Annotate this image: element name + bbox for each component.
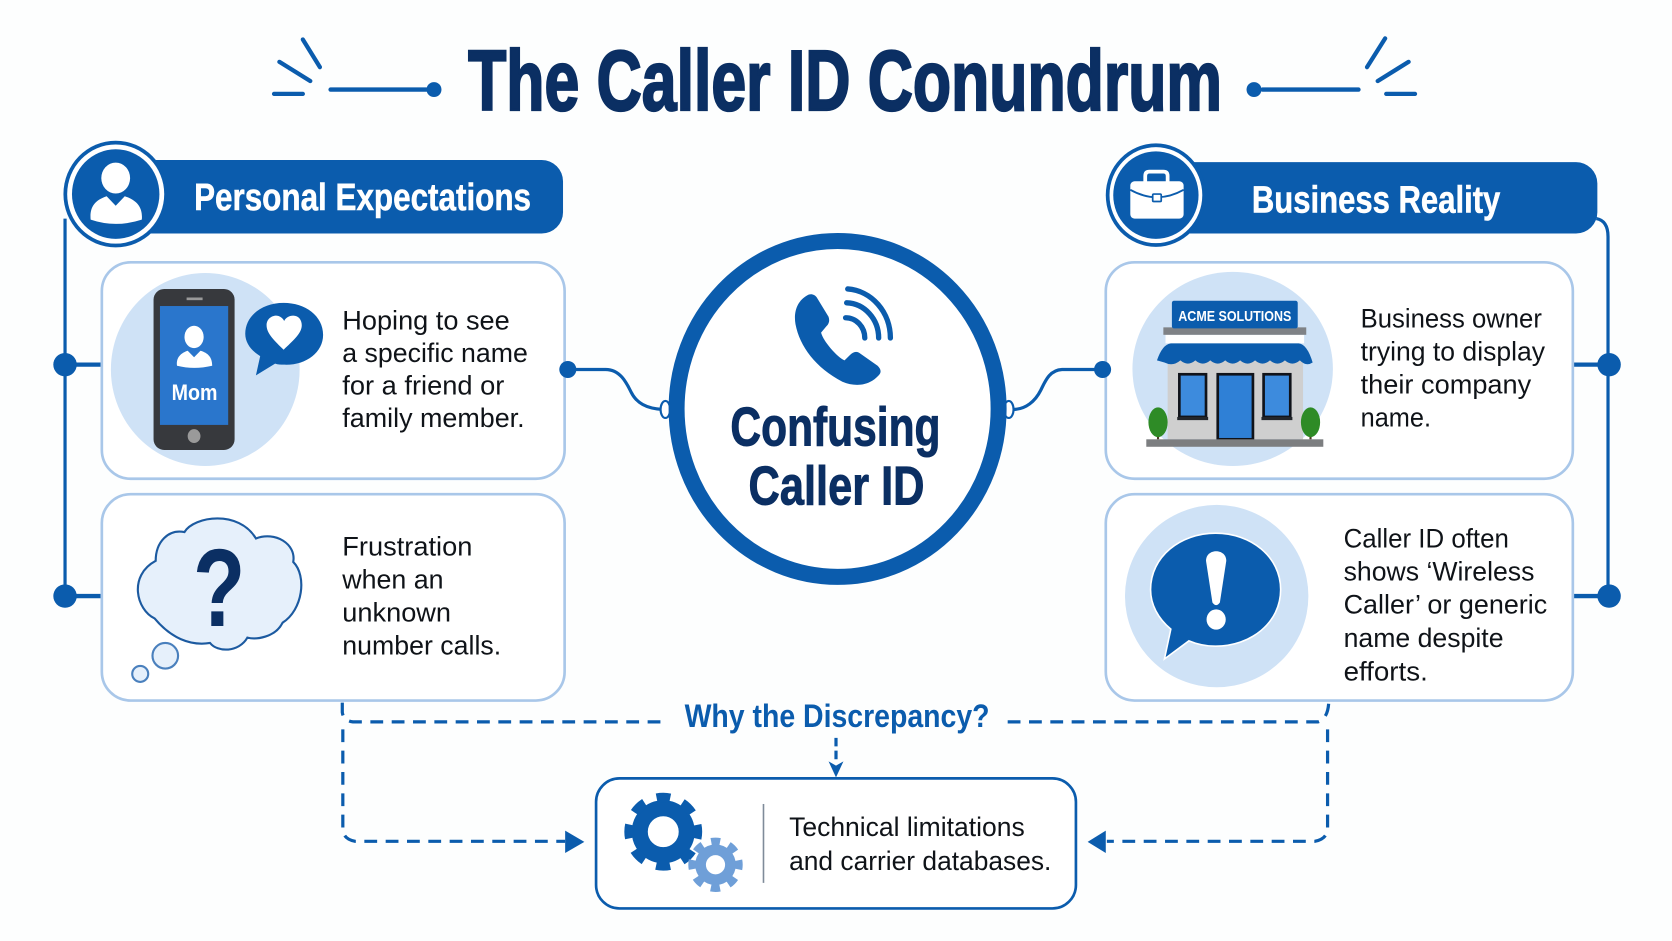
- body text: a specific name: [342, 337, 528, 368]
- center label: Confusing: [730, 397, 940, 458]
- center label: [730, 397, 940, 516]
- icon: thought cloud with question mark: ?: [193, 527, 245, 650]
- center connector right: [1004, 361, 1111, 418]
- body text: unknown: [342, 597, 451, 628]
- body text: efforts.: [1344, 655, 1428, 686]
- icon: thought cloud with question mark: [132, 518, 301, 682]
- icon: heart speech bubble: [245, 303, 323, 375]
- panel: frustration: [102, 494, 565, 701]
- icon: exclamation speech bubble: [1125, 505, 1308, 687]
- icon: phone handset with signal: [795, 289, 890, 385]
- body text: [1361, 302, 1545, 433]
- body text: Frustration: [342, 531, 472, 562]
- panel: hoping to see a name: [102, 262, 565, 479]
- body text: Technical limitations: [789, 811, 1025, 842]
- center label: Caller ID: [749, 455, 925, 516]
- panel heading: Business Reality: [1106, 143, 1597, 247]
- body text: their company: [1361, 368, 1532, 399]
- icon: left title sparks and connector: [274, 39, 441, 97]
- body text: trying to display: [1361, 335, 1545, 366]
- body text: Caller’ or generic: [1344, 589, 1547, 620]
- icon: gears: [629, 798, 739, 888]
- body text: [1344, 523, 1547, 686]
- arrow: right dashed: [1008, 704, 1329, 853]
- body text: family member.: [342, 402, 525, 433]
- body text: and carrier databases.: [789, 845, 1051, 876]
- body text: number calls.: [342, 630, 501, 661]
- arrow: center dashed: [829, 738, 843, 777]
- body text: Hoping to see: [342, 304, 510, 335]
- icon: storefront: [1132, 272, 1333, 466]
- left timeline connector: [53, 219, 101, 608]
- body text: [341, 531, 501, 661]
- body text: [342, 304, 528, 433]
- icon: storefront: ACME SOLUTIONS: [1178, 308, 1291, 325]
- body text: name despite: [1344, 622, 1504, 653]
- panel: technical limitations: [596, 778, 1076, 908]
- panel: business owner: [1106, 262, 1573, 479]
- panel heading: Personal Expectations: [63, 141, 563, 247]
- icon: briefcase: [1130, 172, 1184, 219]
- icon: phone with Mom contact: Mom: [172, 380, 218, 405]
- body text: for a friend or: [342, 370, 504, 401]
- body text: Business owner: [1361, 302, 1542, 333]
- right timeline connector: [1573, 219, 1621, 608]
- icon: phone with Mom contact: [111, 273, 300, 466]
- center circle: Confusing Caller ID: [677, 241, 999, 577]
- divider: [762, 804, 764, 883]
- heading text: Personal Expectations: [194, 176, 531, 219]
- body text: Caller ID often: [1344, 523, 1509, 554]
- heading: why the discrepancy: Why the Discrepancy?: [685, 698, 990, 734]
- icon: right title sparks and connector: [1247, 38, 1415, 97]
- body text: name.: [1361, 402, 1431, 433]
- heading text: Business Reality: [1252, 179, 1501, 222]
- center connector left: [559, 361, 670, 418]
- arrow: left dashed: [342, 703, 663, 853]
- panel: wireless caller: [1106, 494, 1573, 701]
- body text: [789, 811, 1051, 876]
- title: The Caller ID Conundrum: [468, 34, 1222, 129]
- body text: shows ‘Wireless: [1344, 556, 1534, 587]
- body text: when an: [341, 564, 444, 595]
- icon: person: [90, 163, 142, 224]
